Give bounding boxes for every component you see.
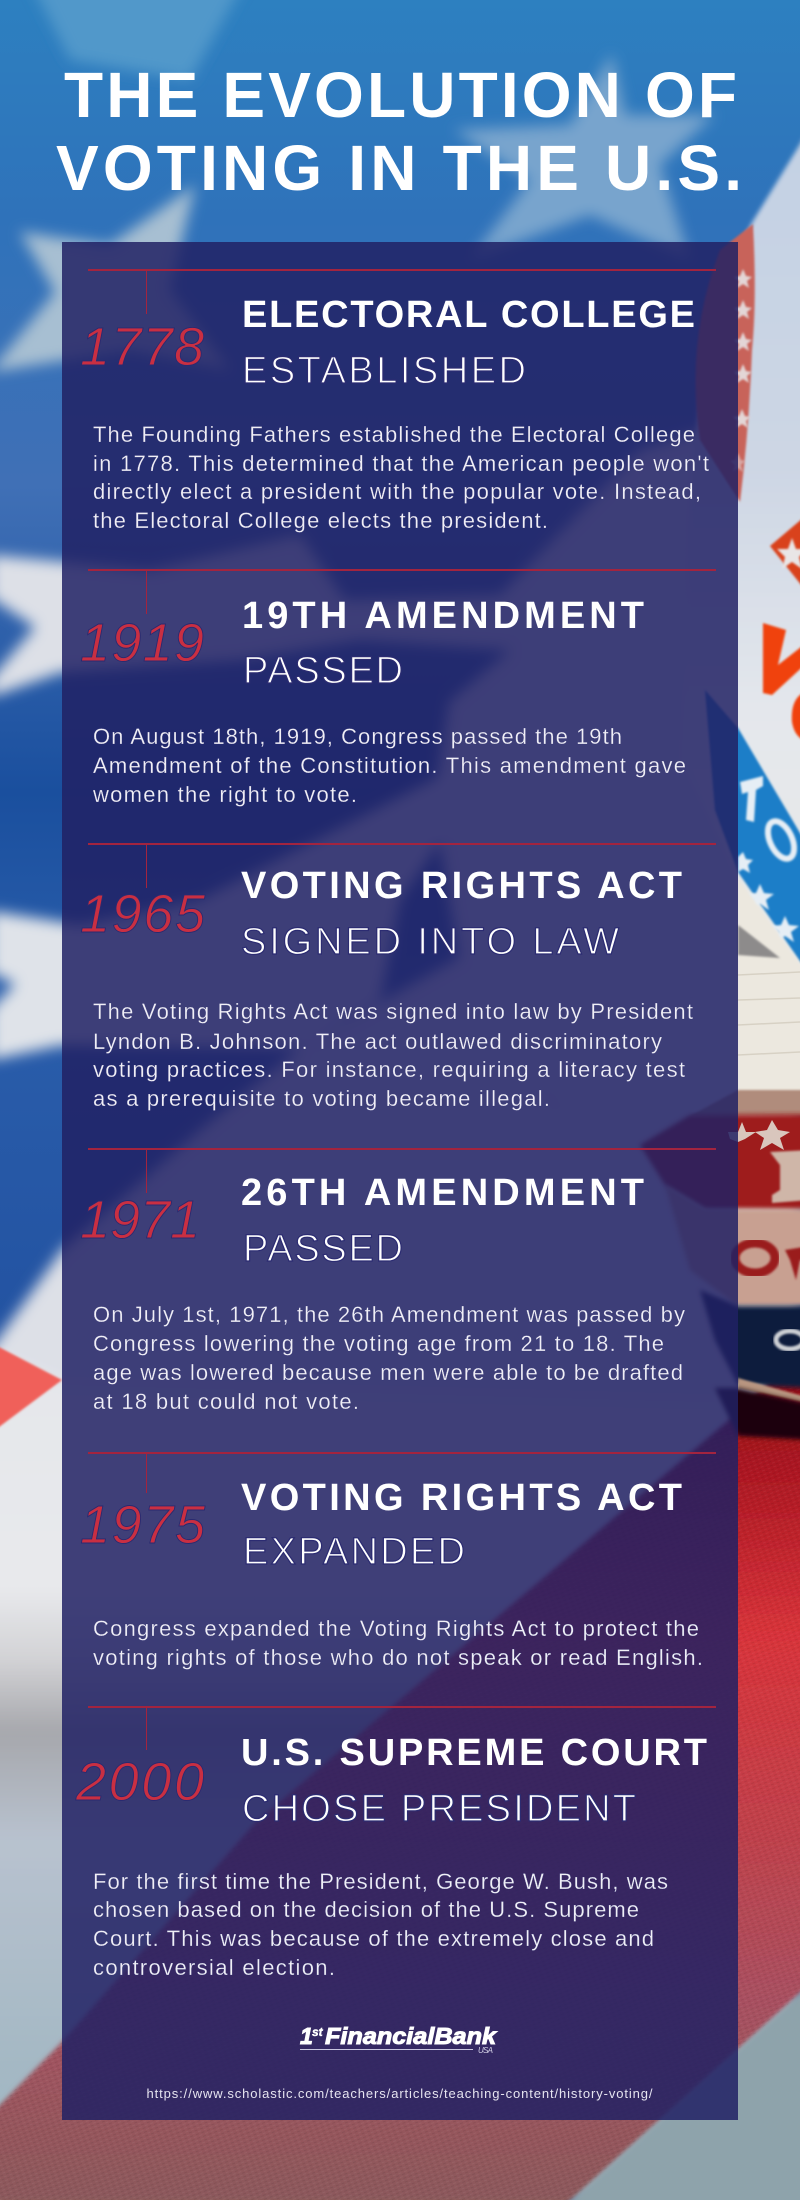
heading (241, 1477, 682, 1573)
sticker badge (680, 128, 800, 1100)
ballot paper stack (738, 878, 800, 1091)
body text: as a prerequisite to voting became illegal. (93, 1086, 550, 1111)
heading: 26TH AMENDMENT (241, 1172, 644, 1214)
orange star diamond (770, 512, 800, 596)
body text: women the right to vote. (92, 782, 357, 807)
red stripe triangle left (0, 1345, 62, 1430)
year: 1778 (80, 317, 204, 377)
body text: Congress expanded the Voting Rights Act to protect the (93, 1616, 699, 1641)
heading: EXPANDED (243, 1531, 465, 1573)
translucent navy panel (62, 242, 738, 2120)
heading: PASSED (243, 650, 403, 692)
year: 1975 (80, 1495, 206, 1555)
heading: SIGNED INTO LAW (241, 921, 619, 963)
heading (241, 1732, 707, 1830)
heading: U.S. SUPREME COURT (241, 1732, 707, 1774)
body text: Congress lowering the voting age from 21 to 18. The (93, 1331, 664, 1356)
body text: chosen based on the decision of the U.S. Supreme (93, 1897, 639, 1922)
heading: 19TH AMENDMENT (242, 595, 644, 637)
logo: 1st Financial Bank USA: st (312, 2025, 324, 2039)
source url: https://www.scholastic.com/teachers/articles/teaching-content/history-voting/ (146, 2086, 653, 2101)
red stripe lower (0, 1340, 800, 2200)
body text: The Founding Fathers established the Electoral College (93, 422, 695, 447)
heading: VOTING RIGHTS ACT (241, 865, 682, 907)
title: VOTING IN THE U.S. (56, 132, 742, 204)
timeline rule (88, 569, 716, 614)
body text (93, 422, 709, 533)
red sticker roll (690, 1090, 800, 1116)
heading: ESTABLISHED (242, 350, 526, 392)
logo: 1st Financial Bank USA (300, 2023, 497, 2055)
body text: age was lowered because men were able to be drafted (93, 1360, 683, 1385)
year: 2000 (75, 1752, 204, 1812)
heading (242, 595, 644, 692)
body text (93, 1302, 685, 1414)
section: 1975 Voting Rights Act expanded (80, 1452, 716, 1670)
year: 1971 (80, 1190, 200, 1250)
title: THE EVOLUTION OF (64, 59, 737, 131)
body text: On July 1st, 1971, the 26th Amendment was passed by (93, 1302, 685, 1327)
timeline rule (88, 843, 716, 888)
heading: PASSED (243, 1228, 403, 1270)
year: 1965 (80, 884, 206, 944)
section: 2000 U.S. Supreme Court (75, 1706, 716, 1980)
timeline rule (88, 269, 716, 314)
body text (93, 1869, 668, 1980)
heading (241, 1172, 644, 1270)
body text (92, 724, 686, 807)
heading (241, 865, 682, 963)
section: 1971 26th Amendment (80, 1148, 716, 1414)
timeline rule (88, 1706, 716, 1750)
body text: For the first time the President, George W. Bush, was (93, 1869, 668, 1894)
body text: controversial election. (93, 1955, 335, 1980)
title (56, 59, 742, 204)
body text: Lyndon B. Johnson. The act outlawed discriminatory (93, 1029, 662, 1054)
heading: CHOSE PRESIDENT (242, 1788, 636, 1830)
body text: directly elect a president with the popular vote. Instead, (93, 479, 701, 504)
orange V (763, 623, 800, 695)
section: 1919 19th Amendment (80, 569, 716, 807)
body text: voting practices. For instance, requiring a literacy test (93, 1057, 685, 1082)
heading: ELECTORAL COLLEGE (242, 294, 695, 336)
body text: The Voting Rights Act was signed into law by President (93, 999, 693, 1024)
body text (93, 1616, 703, 1670)
logo: 1st Financial Bank USA: 1 (300, 2023, 313, 2049)
timeline rule (88, 1148, 716, 1193)
logo: 1st Financial Bank USA: USA (478, 2046, 493, 2055)
body text: Amendment of the Constitution. This amendment gave (93, 753, 686, 778)
heading: VOTING RIGHTS ACT (241, 1477, 682, 1519)
heading (242, 294, 695, 392)
section: 1965 Voting Rights Act (80, 843, 716, 1111)
body text: the Electoral College elects the president. (93, 508, 548, 533)
body text: at 18 but could not vote. (93, 1389, 359, 1414)
body text (93, 999, 693, 1111)
year: 1919 (80, 613, 204, 673)
body text: in 1778. This determined that the American people won't (93, 451, 709, 476)
blue ribbon (705, 690, 800, 975)
body text: voting rights of those who do not speak or read English. (93, 1645, 703, 1670)
timeline rule (88, 1452, 716, 1493)
section: 1778 Electoral College (80, 269, 716, 533)
body text: On August 18th, 1919, Congress passed the 19th (93, 724, 622, 749)
body text: Court. This was because of the extremely close and (93, 1926, 654, 1951)
logo: 1st Financial Bank USA: FinancialBank (325, 2023, 497, 2049)
